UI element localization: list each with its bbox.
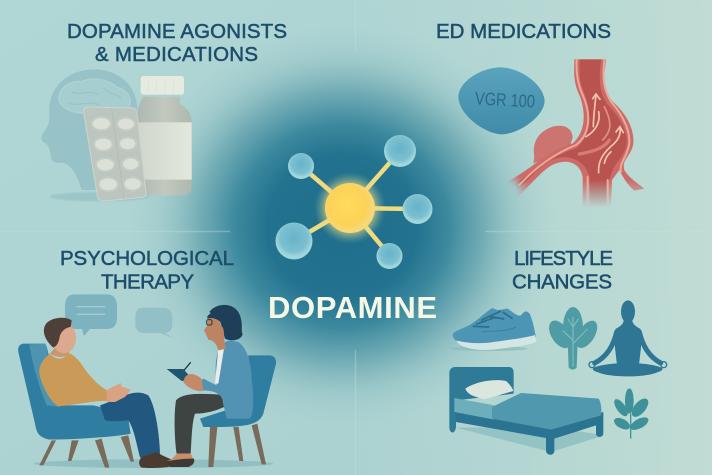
heading: dopamine agonists	[67, 20, 287, 66]
icon: therapist in chair with clipboard	[167, 305, 276, 467]
icon: head silhouette with brain	[41, 69, 150, 201]
icon: blister pack	[84, 107, 146, 201]
icon: blue pill VGR 100: VGR 100	[475, 88, 535, 112]
heading: lifestyle changes: LIFESTYLE	[514, 247, 613, 270]
icon: running shoe	[451, 308, 537, 351]
panel: central dopamine molecule	[268, 135, 437, 325]
icon: medicine bottle	[137, 76, 192, 195]
icon: meditating figure	[589, 300, 667, 376]
heading: psychological therapy: PSYCHOLOGICAL	[60, 247, 234, 270]
icon: leafy greens	[545, 307, 602, 370]
heading: dopamine agonists: & MEDICATIONS	[95, 43, 258, 66]
panel: ed medications	[436, 20, 644, 208]
icon: blue pill VGR 100	[458, 67, 545, 134]
panel: dopamine agonists and medications	[41, 20, 287, 201]
icon: small plant sprig	[612, 388, 651, 439]
icon: dopamine molecule	[276, 135, 432, 269]
heading: psychological therapy	[60, 247, 234, 294]
panel: psychological therapy	[18, 247, 276, 468]
icon: patient in armchair	[18, 318, 273, 468]
heading: ed medications: ED MEDICATIONS	[436, 20, 611, 43]
heading: dopamine: DOPAMINE	[268, 290, 437, 325]
heading: dopamine agonists: DOPAMINE AGONISTS	[67, 20, 287, 43]
heading: psychological therapy: THERAPY	[101, 270, 194, 294]
panel: lifestyle changes	[449, 247, 667, 455]
icon: blood vessel with flow arrows	[508, 59, 644, 208]
heading: lifestyle changes	[512, 247, 613, 294]
icon: bed	[449, 367, 604, 455]
heading: lifestyle changes: CHANGES	[512, 270, 612, 294]
icon: speech bubbles	[65, 294, 174, 338]
